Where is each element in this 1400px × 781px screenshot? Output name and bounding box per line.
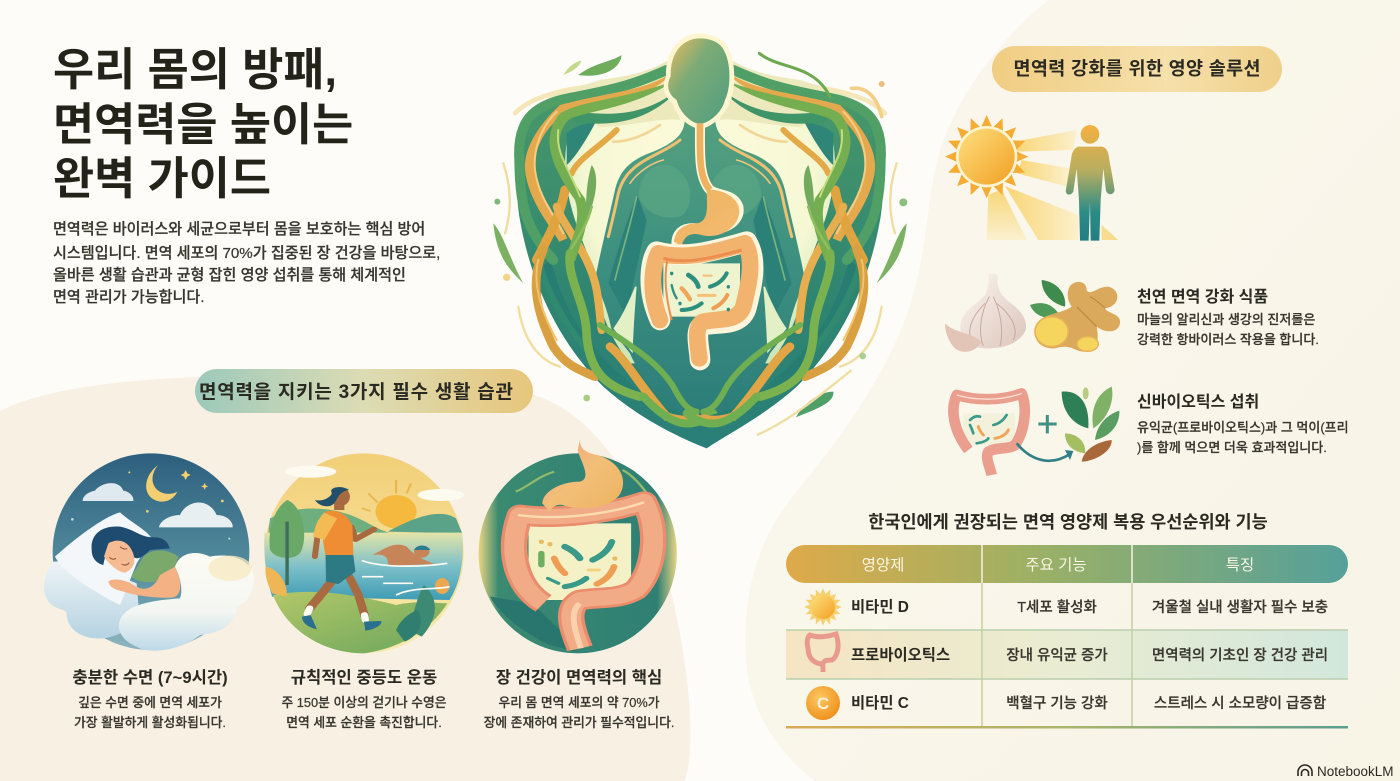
arm [108,567,180,598]
big duvet cloud [119,553,254,651]
table header row: 영양제 [862,556,904,574]
intro text block: 면역력은 바이러스와 세균으로부터 몸을 보호하는 핵심 방어 [53,221,425,238]
table header row [786,545,1348,583]
item: natural foods text: 마늘의 알리신과 생강의 진저롤은 [1137,312,1315,327]
item: natural foods text: 강력한 항바이러스 작용을 합니다. [1137,332,1319,347]
habit 1 caption: 충분한 수면 (7~9시간) [72,668,228,687]
item: natural foods text [1137,288,1319,347]
habit 2 caption: 주 150분 이상의 걷기나 수영은 [281,695,447,710]
title: 우리 몸의 방패, [53,46,337,95]
hair [92,526,170,565]
row: probiotics: 장내 유익균 증가 [1006,647,1108,664]
arrow [1017,443,1070,461]
item: synbiotics text: )를 함께 먹으면 더욱 효과적입니다. [1137,440,1327,455]
bacteria field [529,523,631,600]
left cloud [44,560,140,639]
icon: vitamin C capsule: C [817,694,829,713]
title: 면역력을 높이는 [53,101,353,150]
highlighted row band [786,630,1348,679]
large intestine [651,242,753,360]
right background blob [745,0,1400,781]
esophagus and stomach [674,123,739,247]
heading pill: nutrition solutions [992,46,1282,92]
intro text block: 올바른 생활 습관과 균형 잡힌 영양 섭취를 통해 체계적인 [53,267,406,284]
habit 2 caption: 면역 세포 순환을 촉진합니다. [286,715,442,730]
row: vitamin D: 비타민 D [851,598,909,616]
sky clouds [83,483,133,501]
row: vitamin D [804,588,1328,626]
row: vitamin D: T세포 활성화 [1017,599,1097,616]
grass [273,592,447,653]
shirt [132,550,178,582]
head [668,38,730,124]
hills [268,508,392,537]
row: probiotics [807,634,1328,672]
icon: small intestine [807,634,838,672]
table heading: 한국인에게 권장되는 면역 영양제 복용 우선순위와 기능 [868,512,1268,532]
row: vitamin D: 겨울철 실내 생활자 필수 보충 [1152,599,1328,616]
habit 1 caption: 가장 활발하게 활성화됩니다. [74,715,226,730]
title: 완벽 가이드 [53,155,271,204]
chest shading [638,165,690,217]
lake [264,533,463,600]
row: vitamin C: 스트레스 시 소모량이 급증함 [1154,695,1326,712]
habit: exercise illustration [264,453,464,653]
stomach [542,440,623,512]
left background blob [0,376,690,781]
inner glow [565,60,835,363]
intro text block: 시스템입니다. 면역 세포의 70%가 집중된 장 건강을 바탕으로, [53,245,440,262]
central illustration: body inside vine shield [493,33,907,448]
intro text block: 면역 관리가 가능합니다. [53,289,204,306]
sun [376,495,417,528]
pillow [55,512,152,605]
armpit shadows [608,195,647,317]
tree [269,500,304,558]
row: probiotics: 프로바이오틱스 [851,646,950,664]
row: probiotics: 면역력의 기초인 장 건강 관리 [1152,647,1328,664]
habit 3 caption [484,668,674,730]
icon: sun and person [945,115,1118,241]
vines right [687,60,907,424]
person [1066,125,1115,241]
habit 3 caption: 장에 존재하여 관리가 필수적입니다. [484,715,674,730]
leaves [1062,391,1088,428]
heading pill: lifestyle habits [195,369,533,413]
row: vitamin C: 백혈구 기능 강화 [1006,695,1108,712]
item: synbiotics text: 유익균(프로바이오틱스)과 그 먹이(프리 [1137,420,1349,435]
habit 1 caption: 깊은 수면 중에 면역 세포가 [78,695,222,710]
item: synbiotics text: 신바이오틱스 섭취 [1137,393,1259,411]
habit: sleep illustration [44,453,254,651]
table header row: 주요 기능 [1025,556,1087,574]
habit 2 caption [281,668,447,730]
table header row: 특징 [1226,556,1254,574]
icon: synbiotics gut plus leaves [953,387,1119,475]
habit 3 caption: 우리 몸 면역 세포의 약 70%가 [498,695,660,710]
gut bacteria [672,273,728,310]
heading pill: lifestyle habits: 면역력을 지키는 3가지 필수 생활 습관 [199,381,513,403]
title [53,46,353,204]
row: vitamin C [806,686,1326,720]
shield shape [516,63,884,448]
icon: vitamin C capsule [806,686,840,720]
swimmer [362,545,449,595]
runner [302,487,381,631]
moon [146,465,177,502]
vines left [493,60,713,424]
head glow [664,33,734,129]
item: synbiotics text [1137,393,1349,455]
intro text block [53,221,440,306]
floating leaves and dots [494,53,907,435]
item: natural foods text: 천연 면역 강화 식품 [1137,288,1268,306]
row: vitamin C: 비타민 C [851,694,909,712]
habit 1 caption [72,668,228,730]
plus [1038,415,1057,433]
icon: garlic and ginger [945,274,1120,352]
body silhouette [595,117,805,433]
garlic [960,274,1026,348]
colon [514,502,653,648]
icon: small sun [804,588,842,626]
supplements table [786,545,1348,728]
NotebookLM watermark: NotebookLM [1317,764,1394,779]
heading pill: nutrition solutions: 면역력 강화를 위한 영양 솔루션 [1014,58,1260,79]
arm gaps [613,287,637,353]
bush [265,567,287,597]
habit 3 caption: 장 건강이 면역력의 핵심 [496,668,662,687]
ginger leaves [1042,280,1065,307]
face [104,541,134,573]
bacteria [541,542,615,587]
ginger root [1035,282,1120,352]
habit: gut illustration [479,440,677,653]
habit 2 caption: 규칙적인 중등도 운동 [291,668,437,687]
